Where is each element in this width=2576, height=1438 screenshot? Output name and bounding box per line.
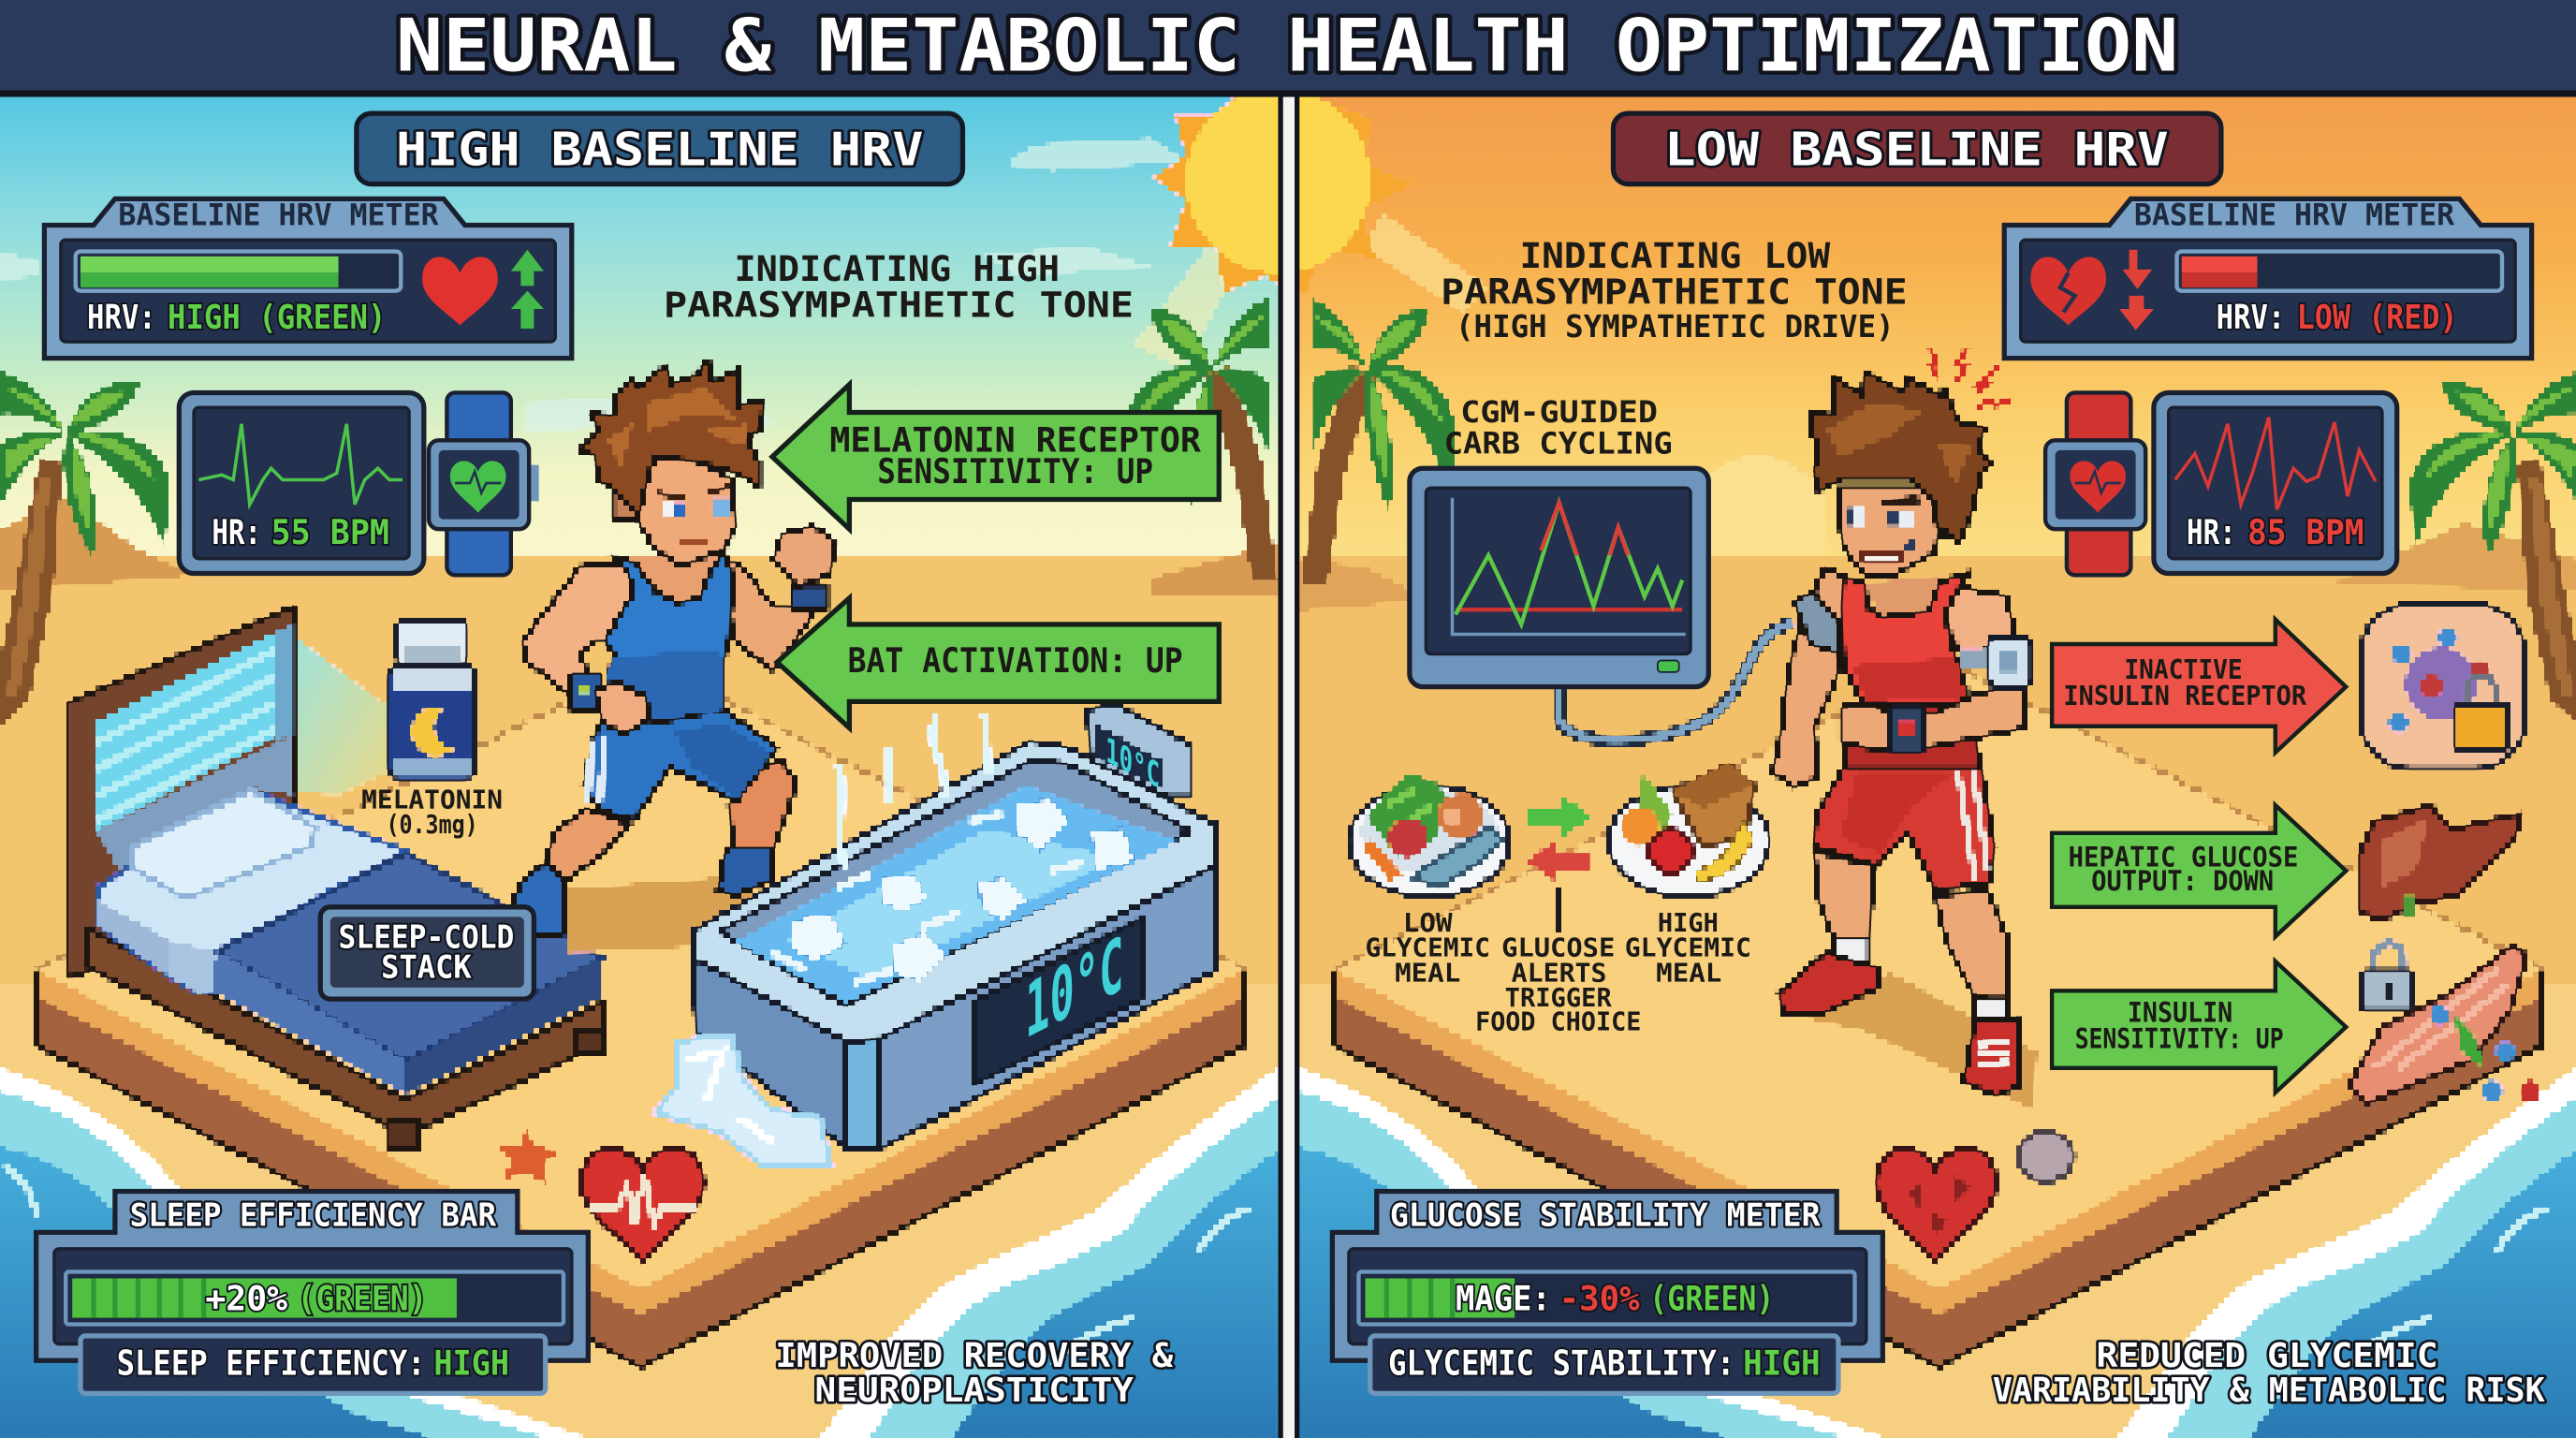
arrow: green to high glycemic: [1526, 795, 1592, 838]
island edge lines: [1334, 661, 2543, 970]
HRV readout: HRV:: [87, 299, 156, 337]
heading: low baseline HRV: [1614, 113, 2221, 184]
panel: high baseline HRV beach scene: [0, 97, 1281, 1438]
HRV readout: LOW (RED): [2297, 299, 2458, 337]
arrow: hepatic glucose output down: [2052, 805, 2346, 936]
melatonin bottle: [388, 620, 476, 781]
text: indicating low parasympathetic tone: (HIGH SYMPATHETIC DRIVE): [1456, 308, 1895, 345]
ocean corner right: [2111, 1068, 2576, 1438]
outcome text: left: IMPROVED RECOVERY &: [775, 1337, 1173, 1375]
food labels: ALERTS: [1512, 960, 1606, 989]
HRV bar: [76, 252, 401, 291]
shell: [2017, 1132, 2073, 1181]
food labels: GLYCEMIC: [1365, 933, 1490, 962]
label: sleep-cold stack: SLEEP-COLD: [339, 919, 514, 957]
text: indicating low parasympathetic tone: PARASYMPATHETIC TONE: [1441, 271, 1908, 313]
panel: glucose stability meter: GLUCOSE STABILITY METER: [1390, 1196, 1821, 1234]
HRV readout: [87, 299, 386, 337]
arrow: insulin sensitivity up: SENSITIVITY: UP: [2075, 1023, 2284, 1055]
food labels: MEAL: [1395, 960, 1460, 989]
heading: high baseline HRV: HIGH BASELINE HRV: [396, 122, 923, 176]
icon: down arrows: [2119, 250, 2154, 330]
ocean corner right: [813, 1068, 1278, 1438]
CGM heading: [1444, 396, 1673, 461]
outcome text: right: [1993, 1337, 2545, 1410]
dunes: [1298, 522, 2576, 611]
readout strip: SLEEP EFFICIENCY:: [117, 1343, 426, 1383]
text: indicating high parasympathetic tone: PARASYMPATHETIC TONE: [664, 285, 1134, 326]
monitor: heart rate 85 BPM: HR:: [2187, 512, 2236, 552]
text: indicating high parasympathetic tone: INDICATING HIGH: [735, 248, 1060, 289]
island top surface: [1334, 661, 2543, 1288]
beach around island: [1298, 986, 2576, 1438]
alert connector: [1556, 886, 1561, 932]
melatonin label: MELATONIN: [361, 786, 503, 815]
insulin cell with lock: [2361, 605, 2525, 769]
food labels: FOOD CHOICE: [1475, 1007, 1641, 1036]
athlete: blue, calm: [513, 360, 836, 953]
island top surface: [37, 661, 1245, 1288]
liver: [2359, 805, 2522, 920]
palm tree left: [1301, 298, 1455, 585]
ice bath: [655, 703, 1218, 1165]
outcome text: left: NEUROPLASTICITY: [815, 1372, 1134, 1410]
heart with ECG: [581, 1149, 703, 1262]
arrow: BAT activation up: [777, 598, 1219, 728]
icon: up arrows: [511, 250, 544, 329]
readout strip: HIGH: [433, 1343, 509, 1383]
melatonin label: [361, 786, 503, 840]
label: sleep-cold stack: [320, 907, 534, 999]
beach around island: [0, 986, 1278, 1438]
progress bar: [66, 1271, 564, 1325]
padlock: [2363, 943, 2413, 1010]
ice cubes in water: [792, 799, 1134, 983]
palm tree right: [1124, 298, 1278, 581]
monitor: heart rate 85 BPM: [2154, 392, 2397, 574]
arrow: insulin sensitivity up: [2052, 961, 2346, 1093]
arrow: hepatic glucose output down: OUTPUT: DOWN: [2091, 865, 2274, 897]
panel: baseline HRV meter high: BASELINE HRV METER: [118, 198, 440, 232]
cable from CGM monitor to arm sensor: [1559, 623, 1794, 741]
light beam: [294, 636, 388, 795]
starfish: [498, 1127, 562, 1186]
sky background: [1298, 97, 2576, 565]
ocean corner left: [1298, 1068, 1909, 1438]
progress bar: (GREEN): [298, 1279, 427, 1319]
arrow: inactive insulin receptor: [2052, 620, 2346, 753]
food: high glycemic meal: [1608, 764, 1769, 897]
arrow: melatonin receptor sensitivity up: SENSITIVITY: UP: [877, 451, 1153, 492]
athlete: red, stressed: [1773, 346, 2037, 1110]
island edge lines: [37, 661, 1245, 970]
small thermometer reading: 10°C: [1105, 730, 1160, 798]
text: indicating low parasympathetic tone: INDICATING LOW: [1519, 235, 1830, 276]
food labels: LOW: [1403, 909, 1453, 938]
text: indicating low parasympathetic tone: [1441, 235, 1908, 345]
progress bar: MAGE:: [1456, 1279, 1551, 1319]
bed: [67, 607, 603, 1151]
steam: [838, 713, 989, 868]
palm tree right: [2410, 372, 2576, 726]
progress bar: (GREEN): [1649, 1279, 1775, 1319]
monitor: heart rate 85 BPM: 85 BPM: [2247, 512, 2364, 552]
panel: baseline HRV meter low: [2004, 198, 2532, 359]
sand specks: [0, 0, 41, 1051]
panel: baseline HRV meter low: BASELINE HRV METER: [2134, 198, 2455, 232]
panel: sleep efficiency bar: SLEEP EFFICIENCY BAR: [130, 1196, 496, 1234]
arrow: insulin sensitivity up: INSULIN: [2128, 997, 2232, 1029]
panel: glucose stability meter: [1332, 1191, 1882, 1393]
heading: high baseline HRV: [357, 113, 962, 184]
text: indicating high parasympathetic tone: [664, 248, 1134, 326]
sun: [1134, 97, 1281, 365]
food labels: TRIGGER: [1505, 984, 1612, 1013]
melatonin label: (0.3mg): [386, 811, 478, 840]
progress bar: [1358, 1271, 1855, 1325]
outcome text: right: VARIABILITY & METABOLIC RISK: [1993, 1372, 2545, 1410]
CGM heading: CGM-GUIDED: [1460, 396, 1658, 430]
icon: broken heart: [2030, 257, 2106, 326]
monitor: heart rate 55 BPM: 55 BPM: [271, 512, 389, 552]
food labels: GLYCEMIC: [1625, 933, 1751, 962]
HRV readout: HRV:: [2217, 299, 2285, 337]
progress bar: -30%: [1559, 1279, 1640, 1319]
muscle cell with receptors: [2349, 945, 2540, 1104]
HRV readout: [2217, 299, 2458, 337]
island side faces: [1334, 970, 2543, 1367]
sun: [1153, 66, 1486, 312]
smartwatch: red heart: [2045, 392, 2145, 575]
sand ground: [0, 556, 1279, 987]
clouds: [0, 138, 1186, 431]
CGM heading: CARB CYCLING: [1444, 427, 1673, 461]
center divider: [1278, 97, 1299, 1438]
food labels: MEAL: [1656, 960, 1721, 989]
tub display reading: 10°C: [1025, 919, 1123, 1056]
arrow: inactive insulin receptor: INSULIN RECEPTOR: [2063, 681, 2306, 712]
food: low glycemic meal: [1349, 772, 1510, 897]
outcome text: left: [775, 1337, 1173, 1410]
readout strip: [1370, 1336, 1838, 1393]
title: NEURAL & METABOLIC HEALTH OPTIMIZATION: [396, 4, 2178, 88]
monitor: heart rate 55 BPM: [179, 392, 424, 574]
arrow: inactive insulin receptor: INACTIVE: [2124, 654, 2243, 685]
outcome text: right: REDUCED GLYCEMIC: [2097, 1337, 2438, 1375]
sky background: [0, 97, 1278, 565]
panel: sleep efficiency bar: [37, 1191, 588, 1393]
arrow: red to low glycemic: [1526, 840, 1592, 882]
small thermometer display: [1088, 703, 1191, 797]
readout strip: GLYCEMIC STABILITY:: [1388, 1343, 1734, 1383]
palm tree left: [0, 372, 169, 726]
island side faces: [37, 970, 1245, 1367]
damaged heart: [1876, 1149, 1996, 1262]
smartwatch: green heart: [429, 392, 539, 575]
icon: heart: [422, 257, 498, 326]
pale clouds: [1445, 456, 1823, 555]
arrow: hepatic glucose output down: HEPATIC GLUCOSE: [2069, 842, 2298, 873]
HRV bar: [2177, 252, 2502, 291]
label: sleep-cold stack: STACK: [381, 948, 472, 986]
panel: low baseline HRV beach scene: [1153, 66, 2576, 1438]
food labels: HIGH: [1658, 909, 1719, 938]
sand ground: [1298, 557, 2576, 1438]
food labels: [1365, 909, 1751, 1036]
ice pile: [655, 1035, 831, 1165]
panel: baseline HRV meter high: [44, 198, 572, 359]
progress bar: +20%: [205, 1279, 287, 1319]
stress sparks: [1930, 346, 2012, 407]
title bar: [0, 0, 2576, 97]
arrow: melatonin receptor sensitivity up: MELATONIN RECEPTOR: [829, 420, 1202, 461]
tub temperature display screen: [973, 918, 1142, 1084]
heading: low baseline HRV: LOW BASELINE HRV: [1664, 122, 2169, 176]
readout strip: [80, 1336, 546, 1393]
HRV readout: HIGH (GREEN): [168, 299, 386, 337]
arrow: BAT activation up: BAT ACTIVATION: UP: [848, 640, 1183, 681]
monitor: heart rate 55 BPM: HR:: [212, 512, 261, 552]
dunes: [0, 496, 1278, 594]
arrow: melatonin receptor sensitivity up: [772, 385, 1219, 529]
ocean corner left: [0, 1068, 611, 1438]
food labels: GLUCOSE: [1501, 933, 1615, 962]
CGM monitor chart: [1410, 468, 1708, 687]
readout strip: HIGH: [1743, 1343, 1821, 1383]
